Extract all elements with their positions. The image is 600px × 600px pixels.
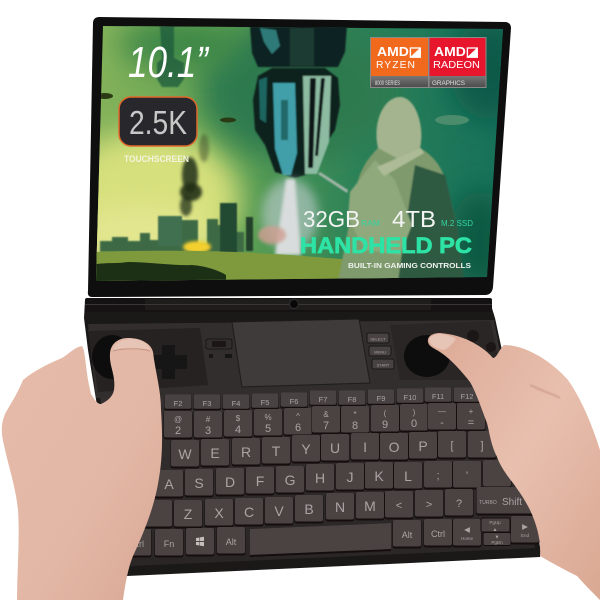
modifier and space row: ▶ [522, 522, 529, 531]
home row: D [225, 474, 235, 490]
hooded figure [318, 97, 464, 282]
mode switch [206, 339, 232, 358]
hinge power button [290, 300, 298, 308]
home row: ; [436, 470, 440, 482]
right hand [428, 333, 600, 600]
number row: 2 [175, 425, 181, 437]
left joystick [92, 335, 132, 379]
d-pad [150, 345, 187, 379]
number row: 3 [205, 425, 211, 437]
number row: % [264, 413, 272, 422]
function key row [164, 388, 481, 410]
qwerty row: ] [480, 440, 484, 452]
modifier and space row: ▼ [495, 534, 499, 540]
function key row: F6 [290, 397, 298, 406]
qwerty row: I [363, 439, 367, 455]
function key row: F10 [404, 393, 416, 402]
badge: AMD Ryzen: AMD◪ [377, 44, 422, 59]
select button [367, 333, 389, 343]
bottom letter row: N [335, 499, 345, 515]
number row: 0 [411, 418, 417, 430]
number row: ( [384, 409, 387, 418]
home row: F [256, 473, 264, 489]
bottom letter row: ? [456, 498, 462, 510]
home row [154, 460, 512, 498]
bottom letter row: Z [184, 506, 193, 522]
number row [164, 403, 486, 440]
qwerty row: W [178, 446, 192, 462]
number row: 8 [352, 420, 358, 432]
number row: 9 [382, 419, 388, 431]
qwerty row: P [418, 438, 428, 454]
badge: AMD Radeon: RADEON [433, 60, 480, 71]
function key row: F7 [319, 395, 327, 404]
screen display [96, 26, 503, 281]
modifier and space row: Alt [226, 537, 237, 547]
keyboard [122, 388, 540, 558]
function key row: F8 [348, 395, 356, 404]
number row: # [206, 415, 211, 424]
number row: — [438, 407, 446, 416]
number row: 7 [323, 420, 329, 432]
subheading: built-in gaming controls: BUILT-IN GAMING CONTROLLS [348, 261, 471, 270]
qwerty row: R [241, 444, 251, 460]
left thumb nail [113, 339, 150, 350]
headline: 10.1 inch: 10.1” [128, 38, 210, 87]
bottom letter row: M [364, 498, 376, 514]
number row: $ [236, 414, 241, 423]
qwerty row: U [330, 440, 340, 456]
function key row: F11 [432, 392, 444, 401]
hinge [85, 298, 492, 312]
home row: J [346, 469, 354, 485]
label: touchscreen: TOUCHSCREEN [124, 154, 189, 164]
number row: ^ [296, 412, 300, 421]
badge: AMD Radeon: GRAPHICS [432, 81, 465, 87]
small distant tower [157, 26, 184, 87]
badge: 2.5K [119, 97, 197, 146]
foreground ground [96, 250, 400, 281]
pink dust [258, 226, 286, 244]
modifier and space row: End [521, 533, 529, 538]
qwerty row: E [210, 445, 220, 461]
bottom letter row [144, 487, 538, 528]
touchpad [232, 319, 370, 387]
bottom letter row: X [214, 505, 224, 521]
spec: 32GB RAM: RAM [361, 219, 380, 228]
qwerty row [170, 431, 496, 468]
qwerty row: O [389, 439, 400, 455]
left hand [2, 338, 162, 600]
home row: A [164, 476, 174, 492]
bottom letter row: B [304, 501, 314, 517]
heading: handheld pc: HANDHELD PC [300, 233, 472, 258]
function key row: F12 [461, 392, 473, 401]
modifier and space row: PgDn [491, 540, 503, 545]
control deck: top panel [88, 319, 503, 398]
spec: 4TB M.2 SSD: M.2 SSD [441, 219, 473, 228]
bottom letter row: Shift [502, 497, 522, 508]
city skyline [100, 203, 253, 253]
home row: G [285, 472, 295, 488]
start button [372, 359, 394, 369]
qwerty row: T [272, 443, 281, 459]
right thumb nail [429, 334, 456, 350]
modifier and space row: Alt [402, 530, 413, 540]
select button: SELECT [370, 336, 386, 342]
bottom letter row: < [396, 500, 402, 512]
badge: AMD Radeon [428, 37, 486, 88]
badge: AMD Ryzen: 8000 SERIES [375, 81, 400, 87]
modifier and space row: ◀ [464, 525, 471, 534]
sky glow [96, 26, 503, 278]
home row: S [194, 475, 204, 491]
spec: 32GB RAM: 32GB [303, 206, 360, 232]
function key row: F3 [203, 399, 211, 408]
modifier and space row: Fn [164, 539, 174, 549]
badge: AMD Ryzen: RYZEN [376, 60, 416, 71]
action buttons [467, 330, 496, 352]
right control pad [390, 321, 503, 380]
number row: ) [413, 408, 416, 417]
modifier and space row [122, 516, 540, 558]
qwerty row: Y [301, 441, 311, 457]
right joystick [404, 335, 450, 377]
qwerty row: [ [450, 440, 454, 452]
bottom letter row: TURBO [479, 500, 497, 506]
number row: 4 [235, 424, 241, 436]
number row: + [469, 407, 474, 416]
light beam [262, 179, 318, 255]
badge: AMD Ryzen [370, 37, 428, 88]
modifier and space row: Ctrl [431, 529, 445, 539]
small flying ships [97, 93, 469, 125]
menu button: MENU [374, 350, 386, 354]
smoke column [180, 134, 209, 216]
function key row: F2 [174, 399, 182, 408]
space bar [250, 523, 391, 557]
menu button [369, 346, 391, 356]
function key row: F4 [232, 399, 240, 408]
bottom letter row: V [274, 503, 284, 519]
start button: START [377, 362, 390, 368]
number row: & [323, 410, 329, 419]
bottom letter row: C [244, 504, 254, 520]
spec: 4TB M.2 SSD [392, 211, 473, 227]
home row: H [315, 470, 325, 486]
badge: AMD Radeon: AMD◪ [434, 44, 479, 59]
explosion fire [183, 241, 211, 253]
spec: 32GB RAM [304, 211, 380, 227]
number row: * [353, 410, 357, 419]
left control pad [88, 328, 208, 392]
badge: 2.5K: 2.5K [129, 104, 187, 141]
number row: = [468, 417, 474, 429]
number row: - [440, 417, 444, 429]
number row: 6 [295, 422, 301, 434]
alien machine [250, 26, 347, 178]
device: laptop base [84, 300, 541, 576]
laptop screen lid [88, 17, 511, 297]
number row: 5 [265, 423, 271, 435]
home row: ' [466, 470, 468, 482]
function key row: F9 [377, 394, 385, 403]
home row: K [374, 468, 384, 484]
spec: 4TB M.2 SSD: 4TB [392, 206, 436, 232]
modifier and space row: PgUp [489, 520, 501, 525]
modifier and space row: Ctrl [130, 539, 144, 549]
function key row: F5 [261, 398, 269, 407]
number row: @ [174, 415, 182, 424]
modifier and space row: Home [461, 536, 473, 541]
bottom letter row: > [426, 499, 432, 511]
home row: L [404, 468, 412, 484]
modifier and space row: ▲ [493, 527, 497, 533]
